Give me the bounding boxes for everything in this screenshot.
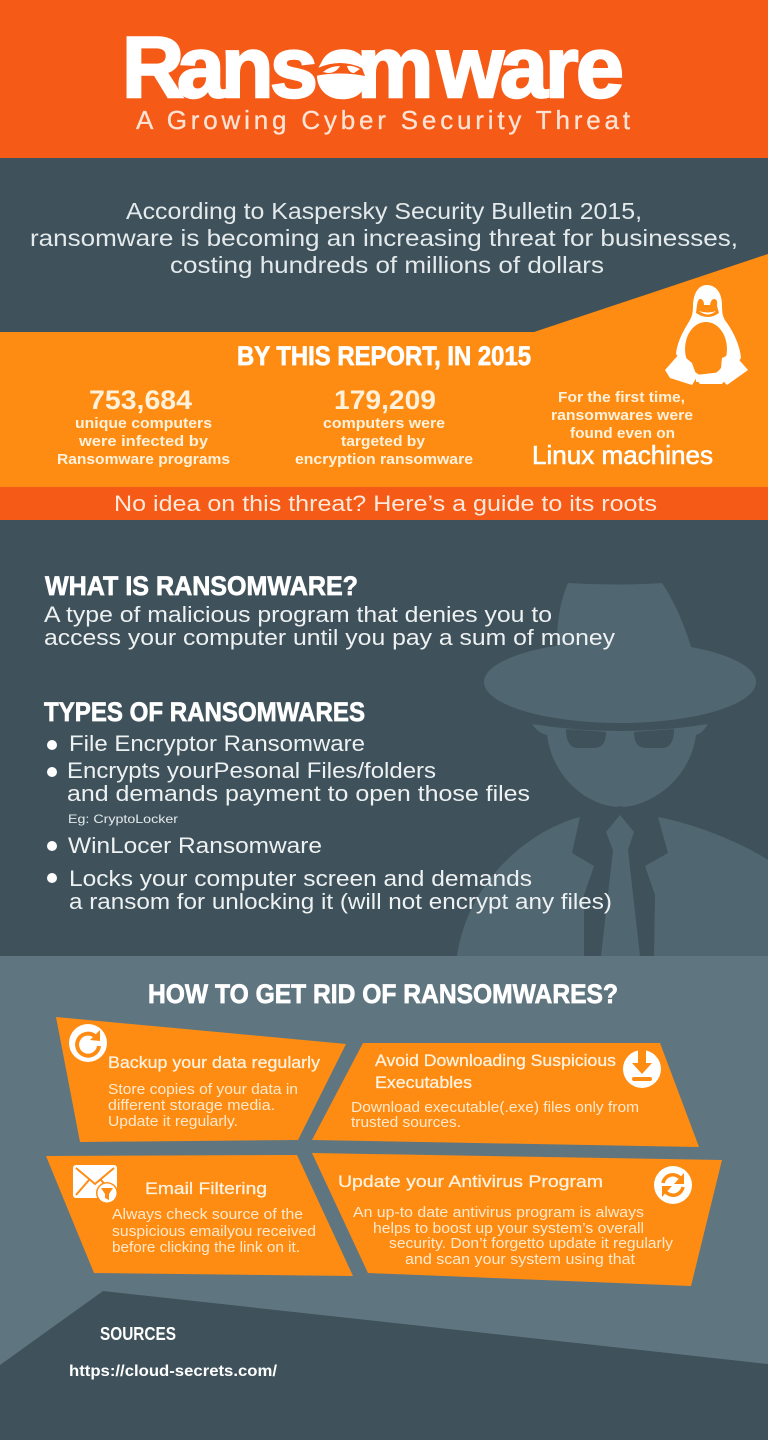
bullet list: types: a ransom for unlocking it (will not encrypt any files) [69,889,612,914]
icon: backup [69,1024,107,1062]
card: update antivirus: and scan your system using that [405,1252,635,1268]
intro text: ransomware is becoming an increasing threat for businesses, [30,225,738,251]
panel: sources [0,1291,768,1440]
bullet list: types: Locks your computer screen and demands [69,866,532,891]
card: avoid downloading: trusted sources. [351,1115,461,1131]
card: email filtering: before clicking the link on it. [112,1240,300,1256]
card: email filtering: suspicious emailyou received [112,1224,316,1240]
definition text: A type of malicious program that denies you to [44,602,552,627]
card: backup: Update it regularly. [108,1114,238,1130]
intro text: According to Kaspersky Security Bulletin 2015, [126,198,642,224]
source url: https://cloud-secrets.com/ [69,1363,278,1380]
stat: infected computers: 753,684 [89,385,192,415]
heading: what is ransomware: WHAT IS RANSOMWARE? [45,571,358,601]
bullet list: types: and demands payment to open those files [67,781,530,806]
card: backup: Store copies of your data in [108,1082,298,1098]
bullet list: types: File Encryptor Ransomware [69,731,365,756]
stat: targeted computers: encryption ransomware [295,451,473,468]
card: update antivirus [312,1153,722,1286]
card: update antivirus: An up-to date antivirus program is always [353,1205,644,1221]
stat: targeted computers [295,385,473,468]
stat: targeted computers: 179,209 [334,385,436,415]
stat: infected computers: were infected by [78,433,209,450]
bullet list: types: Encrypts yourPesonal Files/folders [67,758,436,783]
stat: targeted computers: targeted by [341,433,426,450]
icon: sync [654,1166,692,1204]
definition text [44,602,615,650]
card: update antivirus: security. Don’t forgetto update it regularly [389,1236,674,1252]
stat: infected computers [57,385,230,468]
bullet list: types [47,731,612,914]
card: email filtering: Email Filtering [145,1179,267,1198]
card: backup: Backup your data regularly [108,1053,321,1072]
panel: guide banner [0,487,768,520]
panel: report stats [0,254,768,487]
panel: header [0,0,768,158]
stat: linux: Linux machines [532,440,713,470]
sources heading: SOURCES [100,1324,176,1344]
card: backup [56,1017,346,1142]
stat: linux: For the first time, [558,389,685,406]
card: avoid downloading: Executables [375,1073,472,1092]
banner text: No idea on this threat? Here’s a guide to its roots [114,491,657,516]
intro text: costing hundreds of millions of dollars [170,252,604,278]
stat: linux: ransomwares were [551,407,693,424]
illustration: spy silhouette [457,583,768,956]
title: Ransomware [122,20,624,116]
card: email filtering: Always check source of the [112,1207,303,1223]
stat: infected computers: Ransomware programs [57,451,230,468]
report heading: BY THIS REPORT, IN 2015 [237,341,531,371]
definition text: access your computer until you pay a sum of money [44,625,615,650]
stat: linux: found even on [570,425,675,442]
stat: targeted computers: computers were [323,415,445,432]
icon: email filter [73,1165,118,1204]
stat: infected computers: unique computers [75,415,212,432]
icon: download [623,1050,661,1088]
bullet list: types: Eg: CryptoLocker [68,812,178,826]
card: update antivirus: helps to boost up your system’s overall [373,1221,644,1237]
heading: types of ransomwares: TYPES OF RANSOMWARES [44,697,365,727]
card: update antivirus: Update your Antivirus Program [338,1172,603,1191]
heading: how to get rid: HOW TO GET RID OF RANSOMWARES? [148,979,618,1009]
subtitle: A Growing Cyber Security Threat [136,105,631,135]
card: backup: different storage media. [108,1098,275,1114]
stat: linux [532,389,713,470]
panel: how to get rid [0,956,768,1440]
panel: what is ransomware [0,520,768,956]
bullet list: types: WinLocer Ransomware [68,833,322,858]
intro text [30,198,738,278]
card: email filtering [46,1155,353,1276]
card: avoid downloading [312,1043,699,1147]
panel: intro [0,158,768,338]
card: avoid downloading: Download executable(.exe) files only from [351,1100,639,1116]
icon: linux penguin [665,285,748,385]
card: avoid downloading: Avoid Downloading Suspicious [375,1051,616,1070]
